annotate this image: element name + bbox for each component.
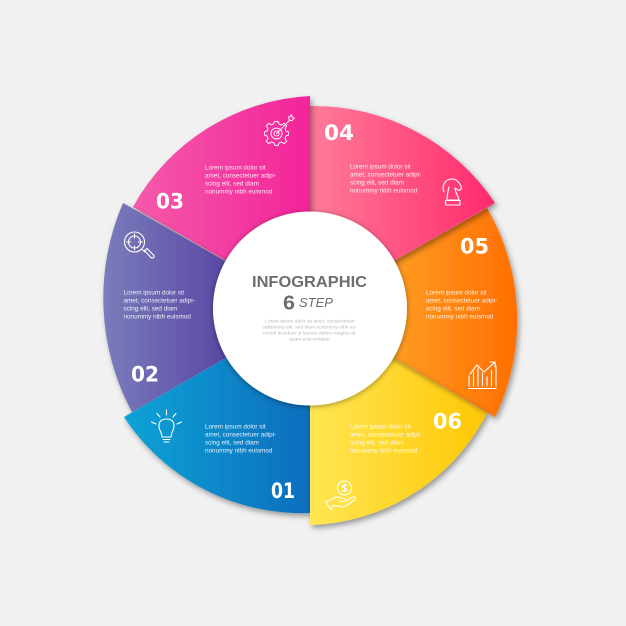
text block: step 01: Lorem ipsum dolor sit	[205, 424, 266, 430]
number 05: 05	[460, 234, 489, 258]
text block: step 06: Lorem ipsum dolor sit	[350, 424, 411, 430]
text block: step 02: amet, consectetuer adipi-	[124, 298, 195, 304]
text block: step 04: Lorem ipsum dolor sit	[350, 164, 411, 170]
segment: step 03 shape	[133, 96, 310, 309]
text block: step 06: nonummy nibh euismod	[350, 448, 418, 454]
icon: hand with coin	[326, 481, 355, 510]
number 06: 06	[433, 410, 462, 434]
number 01: 01	[271, 479, 295, 503]
segment: step 01 shape	[124, 309, 310, 513]
panel: step 06	[308, 356, 491, 532]
text block: step 01: scing elit, sed diam	[205, 440, 259, 446]
text block: step 05: amet, consectetuer adipi-	[426, 298, 497, 304]
center circle	[213, 212, 407, 406]
subheading: 6 step: 6	[283, 292, 295, 314]
segment: step 02 shape	[103, 203, 310, 412]
text block: step 05: scing elit, sed diam	[426, 306, 480, 312]
center description text: ismod tincidunt ut laoreet dolore magna ali-	[263, 330, 357, 336]
text block: step 03: amet, consectetuer adipi-	[205, 172, 276, 180]
subheading: 6 step: STEP	[299, 296, 334, 310]
text block: step 03: nonummy nibh euismod	[205, 188, 273, 196]
text block: step 06: amet, consectetuer adipi-	[350, 432, 421, 438]
shadow cast by step 05	[392, 358, 487, 416]
icon: magnifier	[124, 232, 154, 258]
text block: step 01: nonummy nibh euismod	[205, 448, 273, 454]
panel: step 05	[310, 208, 517, 417]
panel: step 04	[310, 106, 495, 309]
text block: step 02: scing elit, sed diam	[124, 306, 177, 312]
center description text: Lorem ipsum dolor sit amet, consectetuer	[265, 318, 355, 324]
text block: step 06: scing elit, sed diam	[350, 440, 404, 446]
text block: step 04: nonummy nibh euismod	[350, 188, 418, 194]
segment: step 05 shape	[310, 208, 517, 417]
number 04: 04	[324, 121, 354, 145]
number 02: 02	[131, 362, 159, 386]
icon: growth chart	[469, 362, 496, 388]
panel: step 03	[133, 96, 310, 309]
panel: step 01	[124, 309, 310, 513]
text block: step 02: Lorem ipsum dolor sit	[124, 290, 184, 296]
segment: step 06 shape	[310, 309, 487, 525]
text block: step 04: scing elit, sed diam	[350, 180, 404, 186]
text block: step 04: amet, consectetuer adipi-	[350, 172, 421, 178]
icon: gear with arrow target	[265, 115, 294, 145]
subheading: 6 step	[283, 292, 334, 314]
icon: chess knight	[443, 179, 461, 205]
icon: light bulb	[152, 410, 182, 442]
text block: step 03: Lorem ipsum dolor sit	[205, 164, 266, 172]
text block: step 05: nonummy nibh euismod	[426, 314, 494, 320]
segment: step 04 shape	[310, 106, 495, 309]
center description text: quam erat volutpat.	[289, 336, 331, 342]
number 03: 03	[156, 190, 184, 214]
panel: step 02	[103, 203, 310, 412]
text block: step 02: nonummy nibh euismod	[124, 314, 191, 320]
text block: step 05: Lorem ipsum dolor sit	[426, 290, 487, 296]
text block: step 01: amet, consectetuer adipi-	[205, 432, 276, 438]
heading: infographic: INFOGRAPHIC	[252, 274, 367, 291]
text block: step 03: scing elit, sed diam	[205, 180, 259, 188]
center description text: adipiscing elit, sed diam nonummy nibh eu-	[263, 324, 357, 330]
